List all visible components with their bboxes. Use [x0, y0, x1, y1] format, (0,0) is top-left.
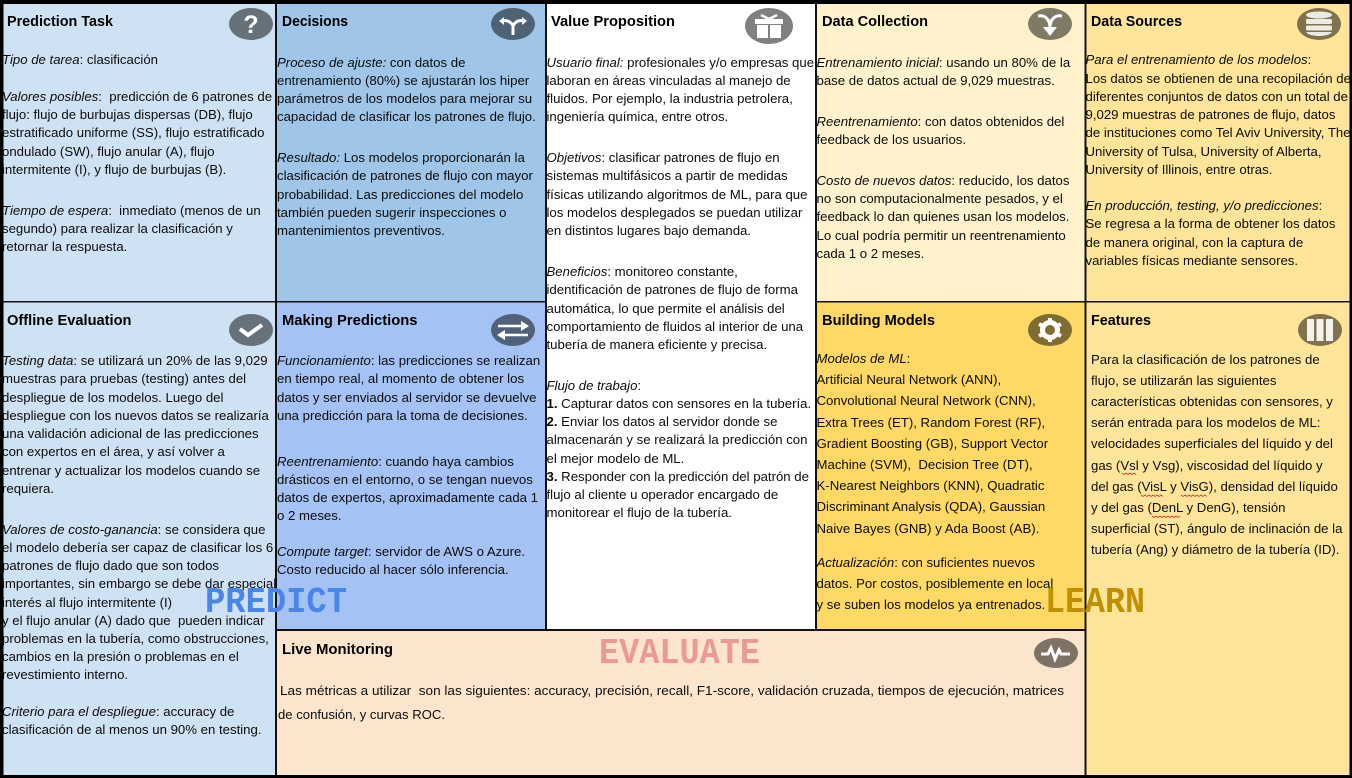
text: decisions body: Resultado: Los modelos proporcionarán la: [277, 150, 525, 165]
text: data collection body: cada 1 o 2 meses.: [816, 246, 924, 261]
text: offline evaluation body: patrones de flujo dado que son todos: [2, 558, 219, 573]
text: decisions body: capacidad de clasificar los patrones de flujo.: [277, 109, 536, 124]
panel: Decisions: [276, 4, 546, 302]
text: building models body: Actualización: con suficientes nuevos: [816, 555, 1035, 570]
text: offline evaluation body: importantes, sin embargo se debe dar especial: [2, 576, 276, 591]
text: offline evaluation body: Testing data: se utilizará un 20% de las 9,029: [2, 353, 268, 368]
panel: Live Monitoring: [276, 630, 1086, 775]
text: data collection body: base de datos actual de 9,029 muestras.: [816, 73, 1055, 88]
icon: merge arrows: [1028, 8, 1072, 40]
text: features body: Para la clasificación de los patrones de: [1091, 352, 1320, 367]
icon: check mark: [229, 314, 273, 346]
text: value proposition body: flujo al cliente u operador encargado de: [546, 487, 778, 502]
text: making predictions body: Costo reducido al hacer sólo inferencia.: [277, 562, 509, 577]
text: offline evaluation body: una validación adicional de las predicciones: [2, 426, 259, 441]
text: value proposition body: Objetivos: clasificar patrones de flujo en: [546, 150, 780, 165]
text: data collection body: feedback lo dan quienes usan los modelos.: [816, 209, 1069, 224]
text: decisions body: probabilidad. Las predicciones del modelo: [277, 187, 523, 202]
text: decisions body: también pueden sugerir inspecciones o: [277, 205, 506, 220]
text: offline evaluation body: revestimiento interno.: [2, 667, 128, 682]
text: data sources body: [1086, 52, 1351, 268]
heading: Making Predictions: Making Predictions: [282, 313, 418, 329]
text: value proposition body: fluidos. Por ejemplo, la industria petrolera,: [546, 91, 793, 106]
text: prediction task body: Tipo de tarea: clasificación: [2, 52, 158, 67]
panel: Data Collection: [816, 4, 1086, 302]
text: data sources body: Para el entrenamiento de los modelos:: [1086, 52, 1311, 67]
text: features body: características obtenidas con sensores, y: [1091, 394, 1333, 409]
text: offline evaluation body: despliegue de los modelos. Luego del: [2, 390, 223, 405]
text: building models body: [816, 351, 1053, 612]
label: PREDICT: PREDICT: [205, 582, 347, 623]
panel: Building Models: [816, 302, 1086, 630]
text: data collection body: Lo cual podría permitir un reentrenamiento: [816, 228, 1066, 243]
text: data sources body: de instituciones como Tel Aviv University, The: [1086, 125, 1351, 140]
text: decisions body: mantenimientos preventivos.: [277, 223, 445, 238]
text: data collection body: Reentrenamiento: con datos obtenidos del: [816, 114, 1064, 129]
text: offline evaluation body: clasificación de al menos un 90% en testing.: [2, 722, 262, 737]
text: prediction task body: retornar la respuesta.: [2, 239, 127, 254]
text: making predictions body: una predicción para la toma de decisiones.: [277, 408, 528, 423]
icon: exchange arrows: [491, 314, 535, 346]
text: value proposition body: tubería de manera eficiente y precisa.: [546, 337, 767, 352]
text: making predictions body: [277, 353, 540, 577]
label: LEARN: LEARN: [1045, 582, 1145, 623]
text: value proposition body: sistemas multifásicos a partir de medidas: [546, 168, 788, 183]
text: value proposition body: [546, 55, 814, 520]
text: building models body: Modelos de ML:: [816, 351, 910, 366]
text: decisions body: clasificación de patrones de flujo con mayor: [277, 168, 533, 183]
text: offline evaluation body: y el flujo anular (A) dado que pueden indicar: [2, 613, 265, 628]
text: data sources body: variables físicas mediante sensores.: [1086, 253, 1298, 268]
text: data collection body: Entrenamiento inicial: usando un 80% de la: [816, 55, 1071, 70]
text: offline evaluation body: [2, 353, 276, 737]
text: data sources body: En producción, testing, y/o predicciones:: [1086, 198, 1322, 213]
icon: gift: [745, 8, 793, 44]
text: building models body: Discriminant Analysis (QDA), Gaussian: [816, 499, 1045, 514]
text: features body: y del gas (DenL y DenG), tensión: [1091, 500, 1286, 515]
text: offline evaluation body: el modelo debería ser capaz de clasificar los 6: [2, 540, 273, 555]
text: features body: gas (Vsl y Vsg), viscosidad del líquido y: [1091, 458, 1323, 473]
panel: Value Proposition: [546, 4, 816, 630]
text: offline evaluation body: Valores de costo-ganancia: se considera que: [2, 522, 265, 537]
text: features body: serán entrada para los modelos de ML:: [1091, 415, 1320, 430]
heading: Value Proposition: Value Proposition: [551, 14, 675, 30]
text: value proposition body: ingeniería química, entre otros.: [546, 109, 728, 124]
heading: Features: Features: [1091, 313, 1151, 329]
text: offline evaluation body: cambios en la presión o problemas en el: [2, 649, 239, 664]
text: data collection body: feedback de los usuarios.: [816, 132, 966, 147]
icon: gear: [1028, 314, 1072, 346]
panel: Prediction Task: [2, 4, 276, 302]
heading: Building Models: Building Models: [822, 313, 935, 329]
text: data sources body: University of Illinois, entre otras.: [1086, 162, 1272, 177]
text: prediction task body: ondulado (SW), flujo anular (A), flujo: [2, 144, 215, 159]
text: offline evaluation body: requiera.: [2, 481, 54, 496]
text: making predictions body: datos de expertos, aproximadamente cada 1: [277, 490, 538, 505]
text: offline evaluation body: con expertos en el área, y así volver a: [2, 444, 226, 459]
text: offline evaluation body: despliegue con los nuevos datos se realizaría: [2, 408, 270, 423]
icon: pulse: [1034, 638, 1078, 668]
text: live monitoring body: de confusión, y curvas ROC.: [278, 707, 445, 722]
text: value proposition body: físicas utilizando algoritmos de ML, para que: [546, 187, 807, 202]
icon: columns: [1298, 314, 1342, 346]
text: value proposition body: automática, lo que permite el análisis del: [546, 301, 785, 316]
text: data sources body: Se regresa a la forma de obtener los datos: [1086, 216, 1336, 231]
text: features body: tubería (Ang) y diámetro de la tubería (ID).: [1091, 542, 1339, 557]
text: prediction task body: [2, 52, 272, 254]
text: offline evaluation body: problemas en la tubería, como obstrucciones,: [2, 631, 269, 646]
text: offline evaluation body: Criterio para el despliegue: accuracy de: [2, 704, 234, 719]
text: making predictions body: en tiempo real, al momento de obtener los: [277, 371, 524, 386]
text: features body: velocidades superficiales del líquido y del: [1091, 436, 1333, 451]
text: value proposition body: en distintos lugares bajo demanda.: [546, 223, 751, 238]
text: data sources body: 9,029 muestras de patrones de flujo, datos: [1086, 107, 1336, 122]
text: value proposition body: identificación de patrones de flujo de forma: [546, 282, 799, 297]
panel: Features: [1086, 302, 1350, 775]
icon: question mark: ?: [243, 11, 259, 39]
text: offline evaluation body: entrenar y actualizar los modelos cuando se: [2, 463, 260, 478]
text: value proposition body: almacenarán y se realizará la predicción con: [546, 432, 807, 447]
text: building models body: Gradient Boosting (GB), Support Vector: [816, 436, 1049, 451]
icon: question mark: [229, 8, 273, 40]
text: data sources body: de manera original, con la captura de: [1086, 235, 1303, 250]
text: making predictions body: Compute target: servidor de AWS o Azure.: [277, 544, 525, 559]
text: value proposition body: el mejor modelo de ML.: [546, 451, 684, 466]
text: value proposition body: los modelos desplegados se puedan utilizar: [546, 205, 803, 220]
text: features body: [1091, 352, 1343, 557]
text: live monitoring body: Las métricas a utilizar son las siguientes: accuracy, precisión, recall, F1-score, validación cruzada, tiempos de ejecución, matrices: [280, 683, 1065, 698]
text: making predictions body: Funcionamiento: las predicciones se realizan: [277, 353, 540, 368]
panel: Making Predictions: [276, 302, 546, 630]
text: making predictions body: datos y ser enviados al servidor se devuelve: [277, 390, 536, 405]
text: value proposition body: Beneficios: monitoreo constante,: [546, 264, 738, 279]
text: prediction task body: Tiempo de espera: inmediato (menos de un: [2, 203, 261, 218]
text: decisions body: Proceso de ajuste: con datos de: [277, 55, 465, 70]
text: live monitoring body: [278, 683, 1065, 722]
heading: Decisions: Decisions: [282, 14, 348, 30]
text: value proposition body: 1. Capturar datos con sensores en la tubería.: [546, 396, 811, 411]
text: building models body: datos. Por costos, posiblemente en local: [816, 576, 1053, 591]
text: features body: del gas (VisL y VisG), densidad del líquido: [1091, 479, 1338, 494]
text: building models body: Naive Bayes (GNB) y Ada Boost (AB).: [816, 521, 1039, 536]
text: decisions body: [277, 55, 536, 238]
text: value proposition body: 3. Responder con la predicción del patrón de: [546, 469, 809, 484]
text: value proposition body: Flujo de trabajo:: [546, 378, 641, 393]
text: offline evaluation body: interés al flujo intermitente (I): [2, 595, 172, 610]
heading: Offline Evaluation: Offline Evaluation: [7, 313, 132, 329]
text: data collection body: [816, 55, 1071, 261]
text: building models body: K-Nearest Neighbors (KNN), Quadratic: [816, 478, 1045, 493]
heading: Prediction Task: Prediction Task: [7, 14, 114, 30]
heading: Data Collection: Data Collection: [822, 14, 928, 30]
text: building models body: Convolutional Neural Network (CNN),: [816, 393, 1036, 408]
text: prediction task body: flujo: flujo de burbujas dispersas (DB), flujo: [2, 107, 253, 122]
text: value proposition body: comportamiento de fluidos al interior de una: [546, 319, 804, 334]
icon: split arrows: [491, 8, 535, 40]
text: data sources body: Los datos se obtienen de una recopilación de: [1086, 71, 1351, 86]
text: data collection body: Costo de nuevos datos: reducido, los datos: [816, 173, 1070, 188]
text: value proposition body: Usuario final: profesionales y/o empresas que: [546, 55, 814, 70]
text: making predictions body: drásticos en el entorno, o se tengan nuevos: [277, 472, 533, 487]
text: decisions body: parámetros de los modelos para mejorar su: [277, 91, 532, 106]
text: value proposition body: 2. Enviar los datos al servidor donde se: [546, 414, 777, 429]
label: EVALUATE: EVALUATE: [599, 633, 760, 674]
text: building models body: Artificial Neural Network (ANN),: [816, 372, 1001, 387]
text: building models body: y se suben los modelos ya entrenados.: [816, 597, 1045, 612]
text: features body: superficial (ST), ángulo de inclinación de la: [1091, 521, 1343, 536]
panel: Offline Evaluation: [2, 302, 276, 775]
text: offline evaluation body: muestras para pruebas (testing) antes del: [2, 371, 246, 386]
text: prediction task body: Valores posibles: predicción de 6 patrones de: [2, 89, 272, 104]
text: value proposition body: laboran en áreas vinculadas al manejo de: [546, 73, 791, 88]
text: prediction task body: estratificado uniforme (SS), flujo estratificado: [2, 125, 264, 140]
text: data sources body: University of Tulsa, University of Alberta,: [1086, 144, 1322, 159]
icon: database: [1297, 8, 1341, 40]
heading: Live Monitoring: Live Monitoring: [282, 642, 393, 658]
text: making predictions body: Reentrenamiento: cuando haya cambios: [277, 454, 514, 469]
text: building models body: Machine (SVM), Decision Tree (DT),: [816, 457, 1033, 472]
text: decisions body: entrenamiento (80%) se ajustarán los hiper: [277, 73, 530, 88]
panel: Data Sources: [1086, 4, 1351, 302]
text: features body: flujo, se utilizarán las siguientes: [1091, 373, 1277, 388]
text: making predictions body: o 2 meses.: [277, 508, 342, 523]
text: data collection body: no son computacionalmente pesados, y el: [816, 191, 1063, 206]
text: building models body: Extra Trees (ET), Random Forest (RF),: [816, 415, 1045, 430]
text: prediction task body: intermitente (I), y flujo de burbujas (B).: [2, 162, 226, 177]
text: data sources body: diferentes conjuntos de datos con un total de: [1086, 89, 1348, 104]
text: value proposition body: monitorear el flujo de la tubería.: [546, 505, 732, 520]
heading: Data Sources: Data Sources: [1091, 14, 1182, 30]
text: prediction task body: segundo) para realizar la clasificación y: [2, 221, 233, 236]
